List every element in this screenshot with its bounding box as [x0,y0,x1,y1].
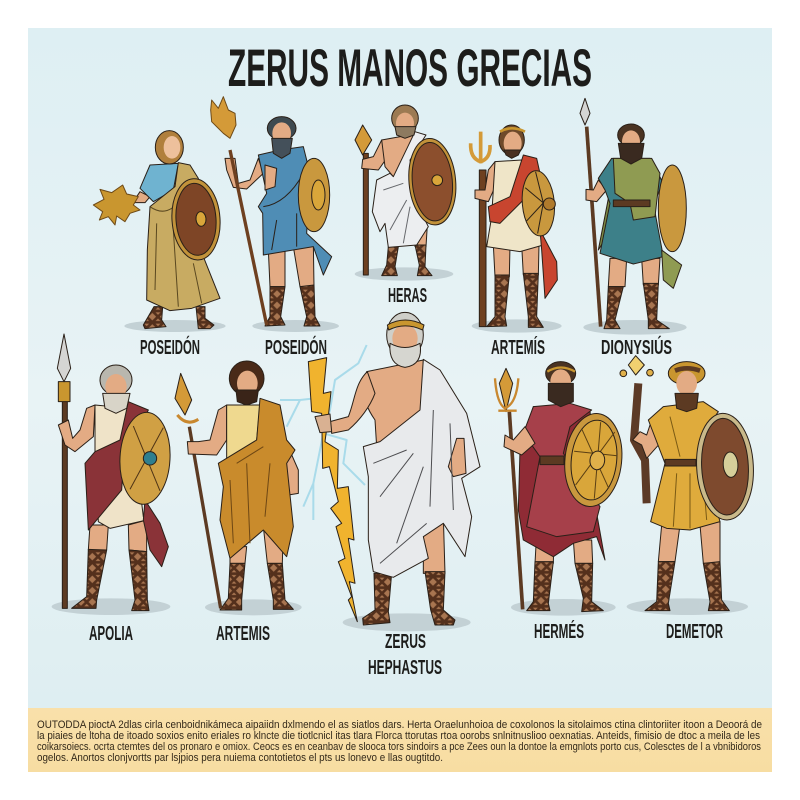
label: Demeter: DEMETOR [666,620,723,643]
figure: Dionysiús [580,98,687,335]
figure: Demeter [620,356,756,615]
label: Hermés: HERMÉS [534,620,584,643]
footer text: ogelos. Anortos clonjvortts par lsjpios pera nuiema contotietos el pts us lonevo e llas ougtitdo. [37,752,443,764]
label: Apolia: APOLIA [89,622,133,645]
label: Zerus: ZERUS [385,630,426,653]
label: Artemis bottom: ARTEMIS [216,622,270,645]
label: Heras: HERAS [388,284,427,307]
footer band [28,708,772,772]
label: Poseidón left: POSEIDÓN [140,335,200,359]
figure: Heras [355,105,459,281]
footer text [37,719,762,764]
icon: lightning sparks [280,345,367,520]
figure: Apolia [52,334,172,615]
label: Poseidón right: POSEIDÓN [265,335,327,359]
figure: Artemís top [471,125,562,333]
figure: Poseidón god [211,97,339,332]
label: Artemís top: ARTEMÍS [491,336,545,359]
figure: Zerus central [280,312,480,631]
label: Dionysiús: DIONYSIÚS [601,335,672,359]
figure: Artemis bottom [175,361,302,615]
figure: Hermés [495,362,626,616]
label: Hephastus: HEPHASTUS [368,656,442,679]
figure: Poseidón goddess [93,131,226,332]
